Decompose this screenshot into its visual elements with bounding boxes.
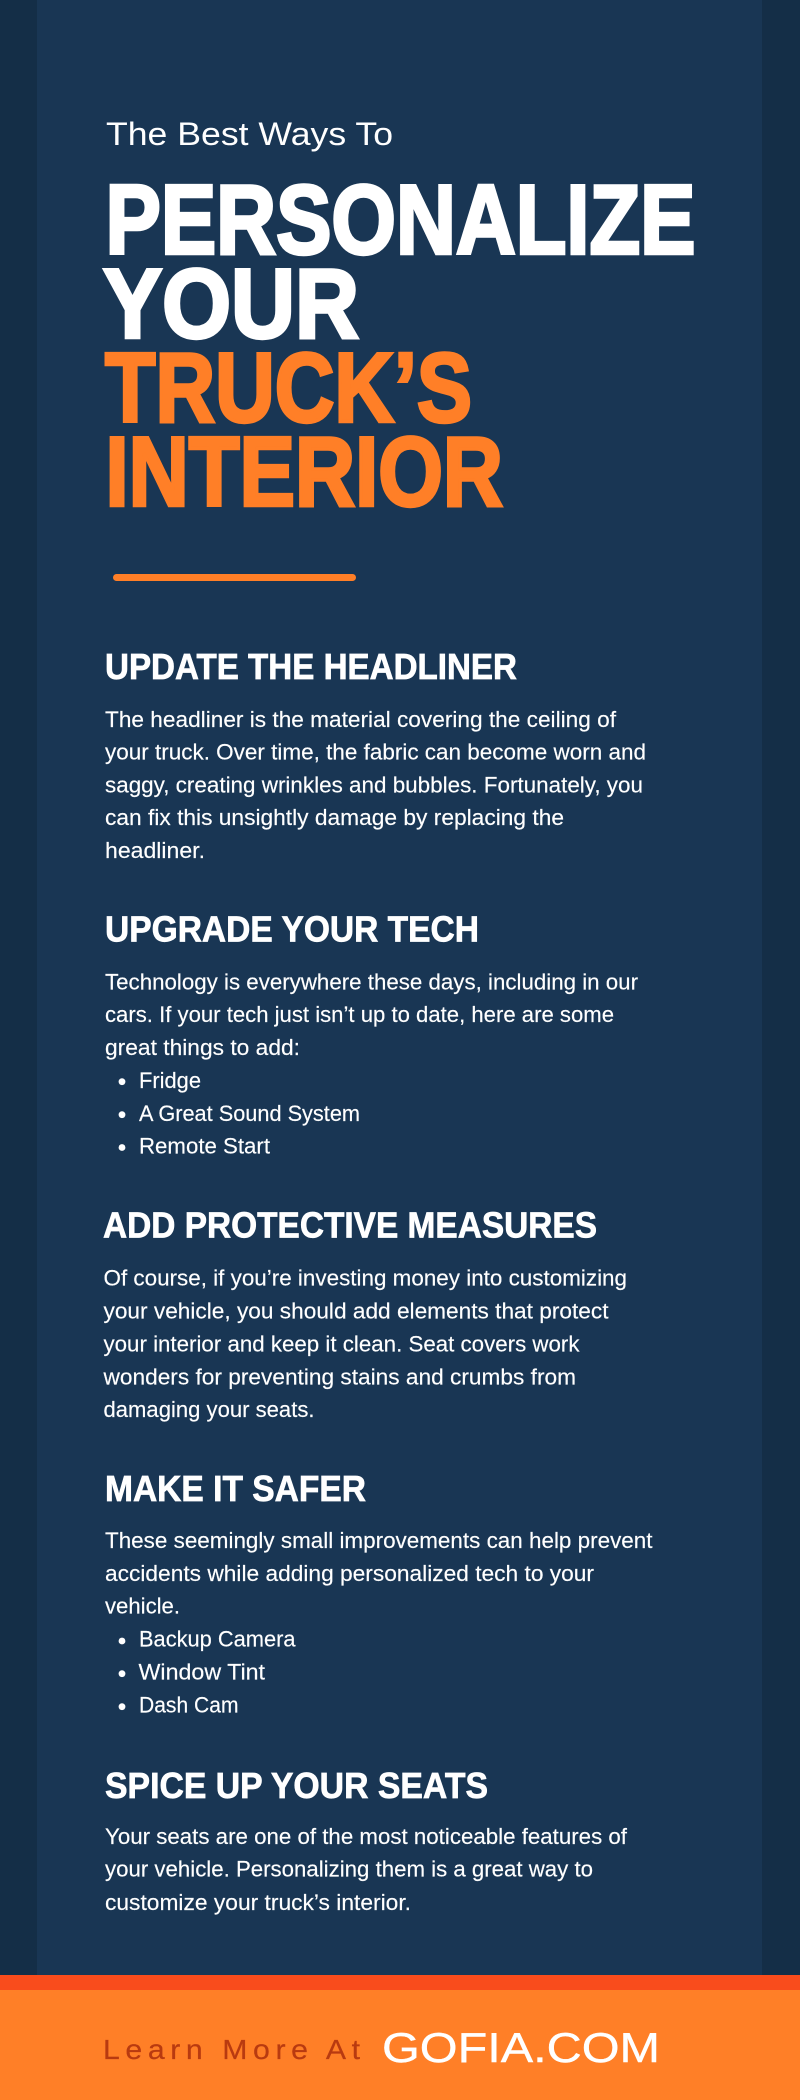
section: make it safer [105,1468,652,1718]
right dark side band [762,0,800,1975]
body text [105,970,638,1060]
body text: vehicle. [105,1594,180,1619]
body text [105,1528,652,1619]
body text: accidents while adding personalized tech to your [105,1561,594,1586]
title line: personalize: PERSONALIZE [106,164,696,274]
section: spice up your seats [105,1765,628,1915]
body text [105,1824,628,1915]
body text: your truck. Over time, the fabric can become worn and [105,740,646,764]
bullet list: Backup Camera [139,1627,296,1652]
footer red stripe [0,1975,800,1990]
footer orange band [0,1990,800,2100]
body text: Of course, if you’re investing money into customizing [104,1266,627,1291]
orange divider bar [113,574,356,581]
section: update the headliner [105,646,646,863]
title line: your: YOUR [103,248,359,358]
body text: damaging your seats. [104,1397,314,1422]
section: upgrade your tech [105,908,638,1159]
body text: Technology is everywhere these days, including in our [105,970,638,994]
heading: MAKE IT SAFER [105,1468,366,1509]
heading: ADD PROTECTIVE MEASURES [103,1204,597,1246]
body text: The headliner is the material covering the ceiling of [105,707,617,732]
bullet list: A Great Sound System [139,1101,360,1126]
body text: your vehicle, you should add elements that protect [104,1298,608,1323]
website: GOFIA.COM [382,2024,660,2071]
body text: saggy, creating wrinkles and bubbles. Fortunately, you [105,772,643,798]
title line: interior: INTERIOR [106,416,503,526]
body text: These seemingly small improvements can help prevent [105,1528,652,1553]
footer [0,1975,800,2100]
call to action label: Learn More At [103,2035,360,2066]
body text: customize your truck’s interior. [105,1890,411,1915]
body text: your vehicle. Personalizing them is a great way to [105,1857,593,1882]
left dark side band [0,0,37,1975]
body text: wonders for preventing stains and crumbs from [102,1364,576,1389]
bullet list: Fridge [139,1068,201,1093]
body text: great things to add: [105,1035,300,1060]
bullet list [119,1068,360,1159]
title [103,164,696,526]
title line: truck's: TRUCK’S [105,332,472,442]
body text: Your seats are one of the most noticeable features of [105,1824,628,1849]
body text [105,707,646,863]
heading: SPICE UP YOUR SEATS [105,1765,488,1806]
bullet list: Remote Start [139,1134,270,1159]
section: add protective measures [102,1204,627,1422]
body text: can fix this unsightly damage by replacing the [105,805,564,830]
bullet list [119,1627,296,1718]
heading: UPDATE THE HEADLINER [105,646,517,687]
bullet list: Window Tint [138,1660,265,1685]
body text: cars. If your tech just isn’t up to date, here are some [105,1002,614,1027]
body text [102,1266,627,1422]
heading: UPGRADE YOUR TECH [105,908,479,950]
bullet list: Dash Cam [139,1693,238,1718]
subtitle: The Best Ways To [106,116,393,152]
body text: headliner. [105,838,205,863]
body text: your interior and keep it clean. Seat covers work [104,1331,581,1356]
